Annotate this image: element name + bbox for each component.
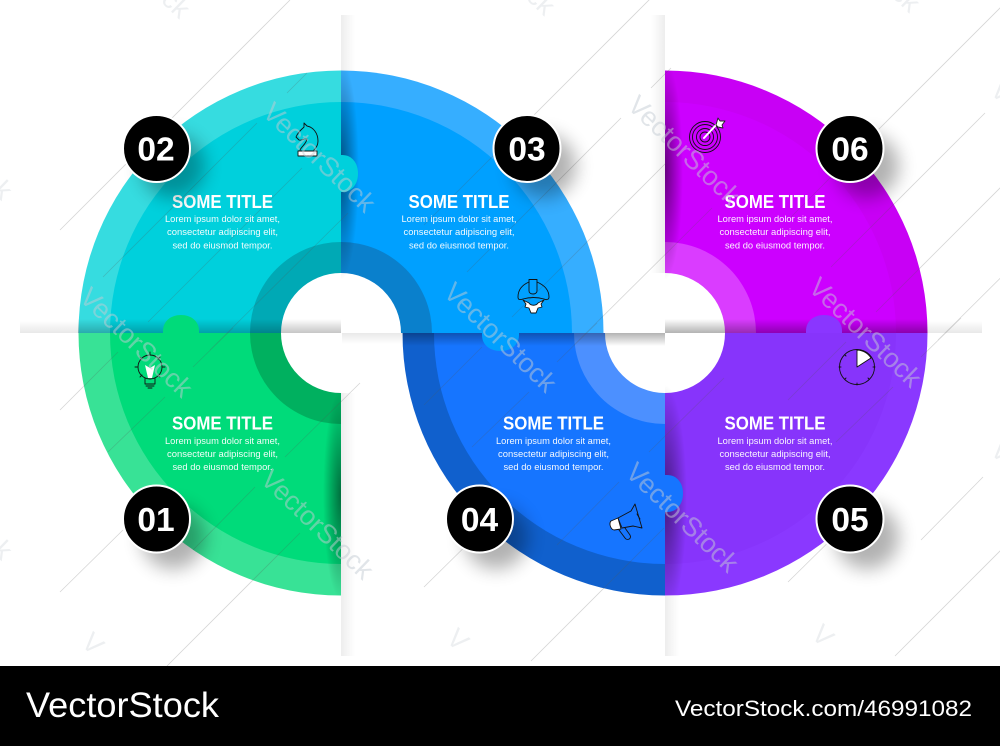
text block 06: Lorem ipsum dolor sit amet, — [718, 214, 832, 225]
icon: megaphone — [610, 504, 642, 539]
icon: light bulb — [135, 352, 165, 388]
badge 01: 01 — [137, 502, 175, 539]
panel 01: green quadrant — [78, 315, 359, 600]
panel 06: magenta quadrant — [665, 70, 928, 333]
badge 06 — [816, 115, 899, 198]
text block 03: Lorem ipsum dolor sit amet, — [402, 214, 516, 225]
text block 01: consectetur adipiscing elit, — [167, 449, 278, 460]
panel 05: violet quadrant — [665, 315, 928, 596]
text block 03 — [402, 192, 516, 252]
text block 02: consectetur adipiscing elit, — [167, 227, 278, 238]
footer logo text: VectorStock — [26, 686, 220, 725]
watermark text: VectorStock — [803, 272, 928, 394]
badge 05: 05 — [831, 502, 869, 539]
text block 06: consectetur adipiscing elit, — [720, 227, 830, 238]
puzzle tab 05 — [806, 315, 842, 334]
watermark text: V — [76, 627, 110, 661]
text block 01: Lorem ipsum dolor sit amet, — [165, 436, 280, 447]
text block 04: consectetur adipiscing elit, — [498, 449, 609, 460]
watermark text: VectorStock — [255, 464, 380, 586]
puzzle tab 01 — [163, 315, 199, 334]
watermark text: V — [806, 619, 840, 653]
text block 04 — [496, 414, 611, 473]
text block 05: consectetur adipiscing elit, — [720, 449, 830, 460]
text block 05: sed do eiusmod tempor. — [725, 462, 825, 473]
text block 03: SOME TITLE — [408, 192, 510, 212]
watermark text: VectorStock — [622, 90, 747, 212]
puzzle tab 02 — [340, 155, 358, 192]
text block 03: consectetur adipiscing elit, — [404, 227, 514, 238]
text block 05 — [718, 414, 832, 473]
badge 05 — [816, 486, 899, 569]
text block 01: SOME TITLE — [172, 414, 273, 434]
text block 01 — [165, 414, 280, 473]
icon: chess knight — [296, 123, 318, 156]
panel 02: teal quadrant — [78, 70, 358, 333]
watermark text: VectorStock — [257, 97, 382, 219]
puzzle tab 03 — [482, 332, 519, 351]
watermark text: VectorStock — [620, 457, 745, 579]
badge 02 — [123, 115, 205, 198]
text block 06 — [718, 192, 832, 252]
text block 02 — [165, 192, 280, 252]
watermark text: VectorStock — [74, 282, 199, 404]
watermark text: VectorStock — [438, 277, 563, 399]
badge 03 — [494, 115, 576, 198]
panel 04: royal blue quadrant — [402, 333, 683, 596]
footer url: VectorStock.com/46991082 — [675, 696, 972, 721]
text block 04: sed do eiusmod tempor. — [504, 462, 604, 473]
text block 05: Lorem ipsum dolor sit amet, — [718, 436, 832, 447]
panel 03: sky blue quadrant — [323, 60, 604, 351]
badge 02: 02 — [137, 132, 175, 168]
text block 06: sed do eiusmod tempor. — [725, 240, 825, 252]
text block 02: Lorem ipsum dolor sit amet, — [165, 214, 280, 225]
text block 01: sed do eiusmod tempor. — [172, 462, 272, 473]
badge 06: 06 — [831, 132, 869, 168]
icon: target with dart — [690, 118, 725, 152]
text block 06: SOME TITLE — [724, 192, 826, 212]
badge 04 — [446, 486, 528, 569]
icon: clock with pie wedge — [839, 350, 875, 385]
text block 03: sed do eiusmod tempor. — [409, 240, 509, 252]
watermark text: V — [441, 623, 475, 657]
puzzle tab 04 — [664, 475, 683, 512]
text block 04: Lorem ipsum dolor sit amet, — [496, 436, 611, 447]
icon: hard hat with gear — [518, 280, 549, 313]
text block 02: sed do eiusmod tempor. — [172, 240, 272, 252]
text block 04: SOME TITLE — [503, 414, 604, 434]
text block 02: SOME TITLE — [172, 192, 273, 212]
text block 05: SOME TITLE — [724, 414, 826, 434]
badge 03: 03 — [508, 132, 546, 168]
badge 01 — [123, 486, 205, 569]
footer bar — [0, 666, 1000, 746]
badge 04: 04 — [461, 502, 498, 539]
